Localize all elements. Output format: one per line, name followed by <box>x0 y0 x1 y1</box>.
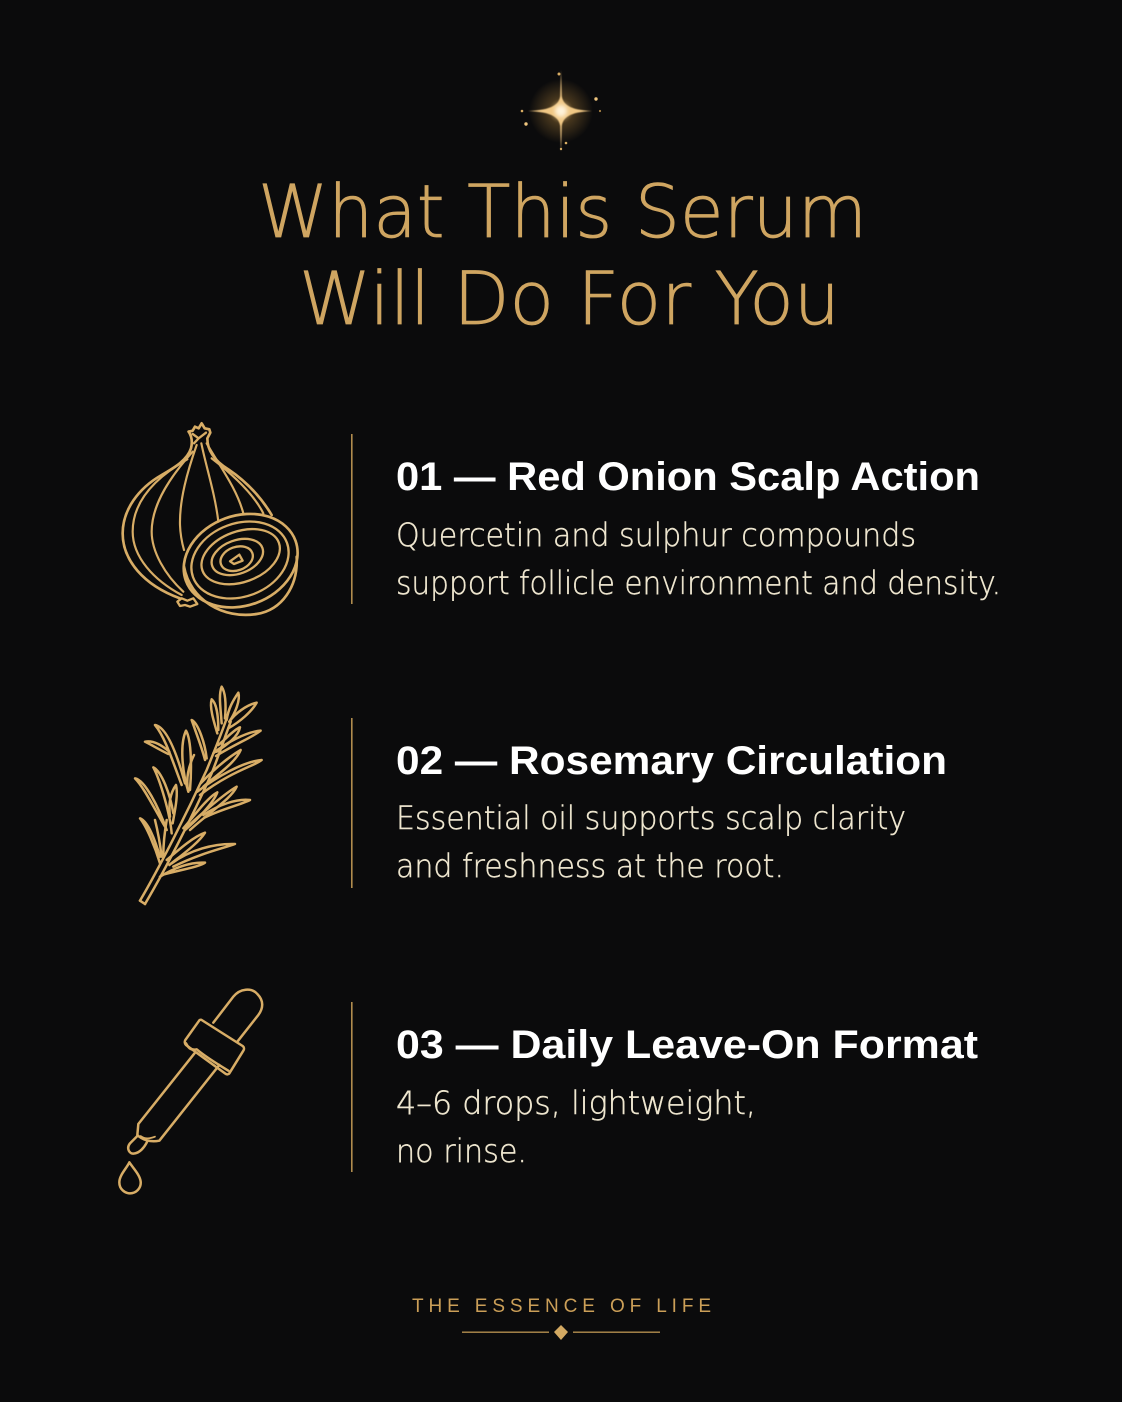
icon: sparkle star <box>521 70 601 152</box>
footer brand <box>412 1296 711 1340</box>
footer brand: THE ESSENCE OF LIFE <box>412 1296 711 1317</box>
divider <box>351 434 353 604</box>
icon: onion <box>123 423 311 623</box>
divider <box>351 1002 353 1172</box>
icon: dropper with drop <box>119 990 262 1193</box>
description: 4–6 drops, lightweight, <box>396 1084 756 1122</box>
description: and freshness at the root. <box>396 847 784 885</box>
description: no rinse. <box>396 1132 527 1170</box>
panel: red onion benefit <box>123 423 1001 623</box>
description <box>396 516 1001 602</box>
heading: 02 — Rosemary Circulation <box>396 739 947 783</box>
heading: 03 — Daily Leave-On Format <box>396 1023 978 1067</box>
title <box>258 170 867 342</box>
description <box>396 1084 756 1170</box>
panel: dropper benefit <box>119 990 978 1193</box>
description <box>396 799 906 885</box>
title: What This Serum <box>258 170 867 255</box>
heading: 01 — Red Onion Scalp Action <box>396 455 980 499</box>
description: Essential oil supports scalp clarity <box>396 799 906 837</box>
icon: rosemary sprig <box>135 687 262 904</box>
divider <box>351 718 353 888</box>
description: support follicle environment and density. <box>396 564 1001 602</box>
description: Quercetin and sulphur compounds <box>396 516 916 554</box>
title: Will Do For You <box>299 257 840 342</box>
panel: rosemary benefit <box>135 687 947 904</box>
